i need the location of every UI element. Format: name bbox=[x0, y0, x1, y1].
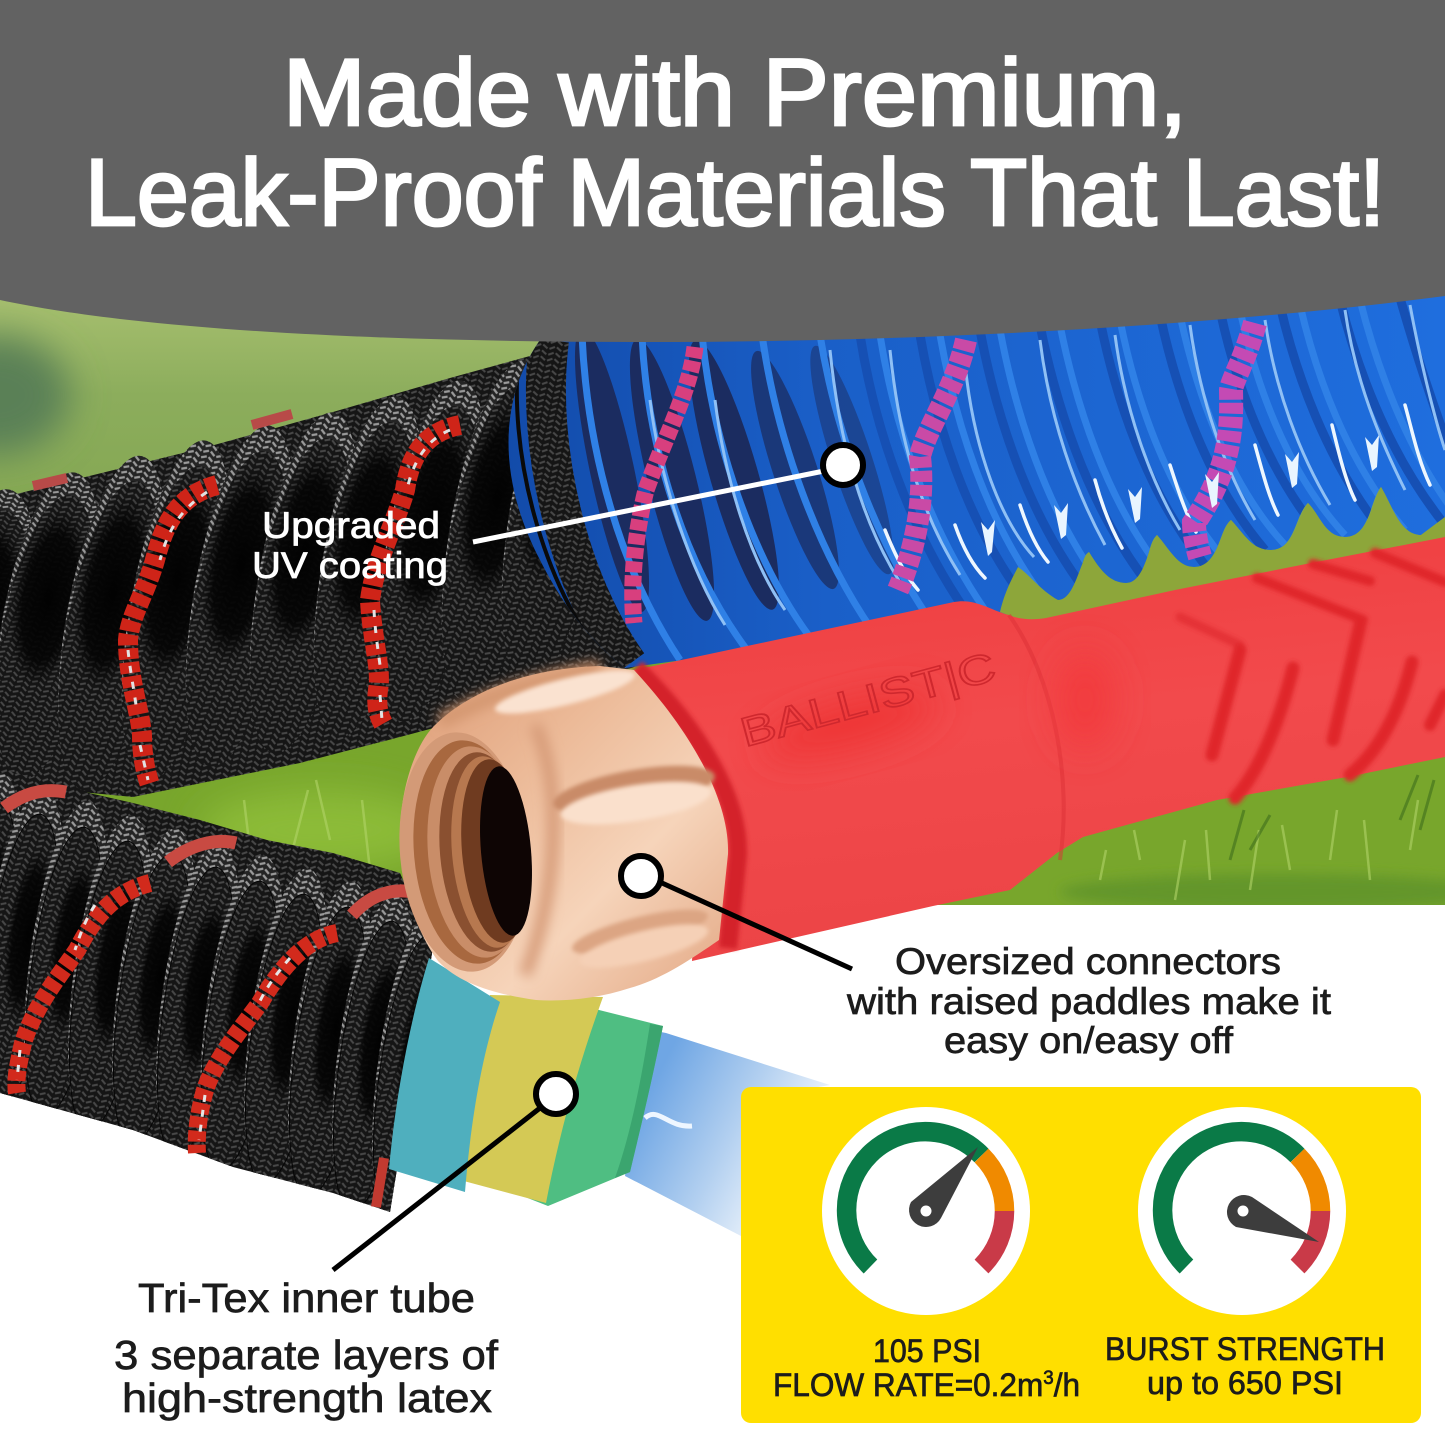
callout: UV coating bbox=[252, 445, 863, 586]
flow rate caption bbox=[773, 1333, 1080, 1403]
copper connector bbox=[390, 662, 728, 1000]
blue translucent hose section bbox=[490, 290, 1445, 690]
ribs bbox=[582, 300, 1445, 660]
callout: UV coating: UV coating bbox=[252, 545, 448, 586]
embossed brand text: BALLIST|C bbox=[735, 643, 1000, 756]
callout: tri-tex inner tube: high-strength latex bbox=[122, 1375, 493, 1421]
yellow layer bbox=[460, 995, 603, 1203]
upper black braided hose bbox=[0, 335, 640, 798]
green background showing behind blue tube bbox=[1000, 487, 1445, 630]
red braid stripes on lower hose bbox=[4, 791, 412, 1207]
threaded opening bbox=[390, 727, 538, 977]
white lower streaks bbox=[885, 405, 1430, 590]
tri-tex latex layers bbox=[389, 958, 663, 1206]
paddle bottom bbox=[568, 901, 712, 963]
callout: oversized connectors: easy on/easy off bbox=[944, 1020, 1234, 1061]
gauge: flow rate bbox=[822, 1107, 1030, 1315]
flow rate caption: FLOW RATE=0.2m bbox=[773, 1367, 1047, 1403]
flow rate caption: 3 bbox=[1043, 1368, 1054, 1389]
burst strength caption: up to 650 PSI bbox=[1147, 1365, 1343, 1401]
burst strength caption bbox=[1105, 1331, 1385, 1401]
burst strength caption: BURST STRENGTH bbox=[1105, 1331, 1385, 1367]
yellow stats panel bbox=[741, 1087, 1421, 1423]
dark collar beside connector bbox=[636, 668, 738, 948]
grass background bbox=[0, 290, 1445, 910]
black braid band inside tube bbox=[546, 340, 628, 665]
callout: tri-tex inner tube bbox=[114, 1074, 576, 1421]
green layer bbox=[520, 1005, 663, 1206]
light rib streaks bbox=[650, 305, 1445, 625]
flow rate caption: /h bbox=[1054, 1367, 1080, 1403]
copper shading bbox=[525, 725, 553, 975]
title: Leak-Proof Materials That Last! bbox=[85, 140, 1385, 246]
callout: oversized connectors: with raised paddles make it bbox=[846, 981, 1332, 1022]
teal layer bbox=[389, 958, 500, 1192]
dark rib shadows bbox=[860, 298, 1445, 610]
red rubber sleeve bbox=[625, 537, 1445, 961]
flow rate caption: 105 PSI bbox=[873, 1333, 981, 1369]
callout: oversized connectors bbox=[621, 856, 1332, 1061]
callout: oversized connectors: Oversized connectors bbox=[895, 941, 1281, 982]
header band bbox=[0, 0, 1445, 342]
inner tube fading blue bbox=[625, 1028, 830, 1236]
dark inner coils bbox=[575, 342, 894, 621]
sleeve ribs bbox=[1180, 553, 1445, 798]
gauge: burst strength bbox=[1138, 1107, 1346, 1315]
lower black braided hose bbox=[0, 771, 432, 1212]
callout: tri-tex inner tube: 3 separate layers of bbox=[114, 1332, 499, 1378]
white highlights bbox=[981, 435, 1379, 556]
paddle top bbox=[492, 662, 638, 722]
pink braid seen through tube bbox=[633, 323, 1255, 623]
paddle middle bbox=[550, 756, 718, 824]
callout: tri-tex inner tube: Tri-Tex inner tube bbox=[138, 1275, 475, 1321]
title bbox=[85, 40, 1385, 246]
red braid stripes on upper hose bbox=[33, 414, 460, 785]
title: Made with Premium, bbox=[283, 40, 1187, 146]
callout: UV coating: Upgraded bbox=[262, 505, 440, 546]
